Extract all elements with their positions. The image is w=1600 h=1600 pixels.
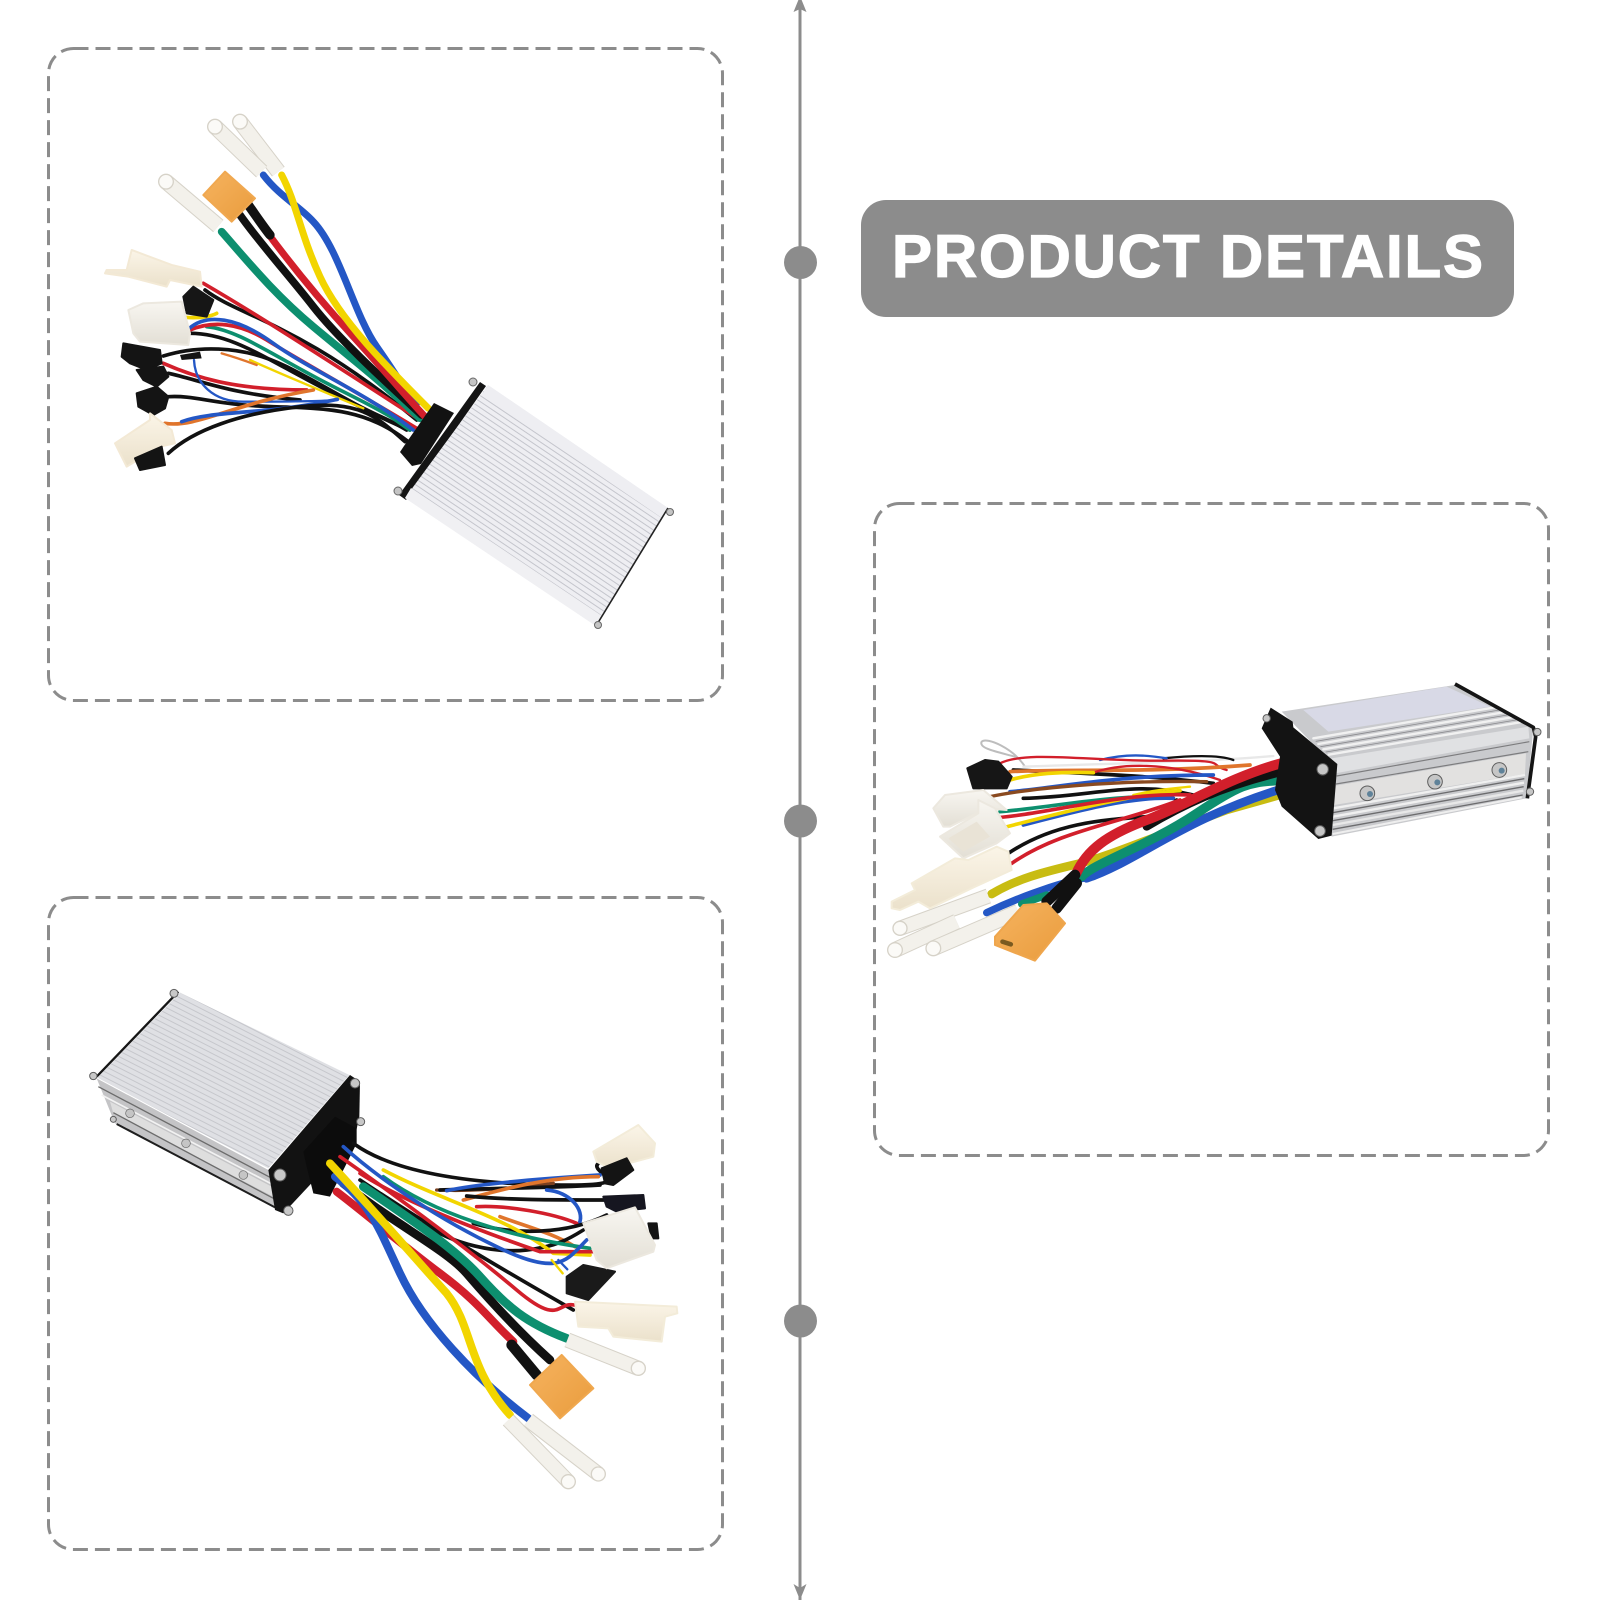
black rear edge bbox=[1455, 684, 1536, 798]
connectors bbox=[888, 760, 1065, 961]
connectors bbox=[105, 114, 278, 470]
white bullet terminals bbox=[159, 114, 278, 226]
black lower connector bbox=[135, 447, 165, 470]
timeline axis with arrows and dots bbox=[784, 0, 817, 1600]
wiring harness bbox=[981, 741, 1283, 913]
screws bbox=[1263, 715, 1541, 836]
lower cooling fins bbox=[1333, 775, 1525, 834]
white bullet terminals bbox=[508, 1340, 645, 1489]
black plug plate bbox=[1262, 708, 1337, 839]
black plug plate bbox=[268, 1075, 360, 1213]
white connector one bbox=[933, 790, 1007, 827]
white three-pin connector bbox=[128, 302, 190, 345]
side screws bbox=[126, 1109, 248, 1179]
screws bbox=[394, 378, 674, 628]
dot: lower bbox=[784, 1304, 817, 1338]
white connector two bbox=[940, 800, 1010, 858]
controller box bbox=[1262, 684, 1541, 839]
side panel bbox=[1334, 753, 1526, 805]
ribbed top face bbox=[97, 993, 349, 1168]
light bottom band bbox=[405, 488, 602, 626]
cream connector bbox=[892, 847, 1012, 910]
dot: upper bbox=[784, 246, 817, 279]
title badge bbox=[861, 200, 1514, 317]
lavender top label area bbox=[1303, 687, 1490, 732]
light top band bbox=[482, 385, 668, 518]
ribbed top face bbox=[405, 385, 668, 626]
black edge bbox=[399, 382, 486, 500]
dot: middle bbox=[784, 804, 817, 838]
title text: PRODUCT DETAILS bbox=[892, 223, 1483, 290]
orange power connector bbox=[203, 172, 255, 222]
cream two-pin connector bbox=[575, 1302, 677, 1342]
arrow: bottom bbox=[794, 1584, 806, 1600]
white connector bbox=[583, 1207, 655, 1268]
controller box bbox=[394, 378, 674, 628]
screws bbox=[90, 989, 365, 1215]
cream top connector bbox=[593, 1125, 655, 1168]
silver body bbox=[1282, 685, 1533, 837]
white bullet terminals bbox=[888, 896, 1018, 957]
controller box bbox=[90, 989, 365, 1215]
panel: bottom-left product view bbox=[48, 898, 722, 1550]
black small connectors bbox=[122, 343, 162, 370]
arrow: top bbox=[794, 0, 806, 12]
black plug block bbox=[303, 1117, 357, 1197]
black edge bbox=[97, 992, 178, 1077]
wiring harness bbox=[330, 1143, 608, 1418]
black switch connector bbox=[967, 760, 1012, 788]
cream two-pin connector bbox=[105, 250, 202, 287]
black connector bbox=[183, 287, 213, 317]
wiring harness bbox=[163, 175, 428, 453]
orange power connector bbox=[995, 903, 1065, 961]
upper cooling fins bbox=[1313, 707, 1520, 755]
orange power connector bbox=[530, 1355, 593, 1418]
black plug block bbox=[400, 403, 454, 466]
panel: top-left product view bbox=[48, 48, 722, 700]
black small connectors bbox=[602, 1158, 633, 1185]
highlighted band bbox=[1332, 727, 1529, 773]
panel: right product view bbox=[874, 504, 1548, 1156]
cream lower connector bbox=[115, 413, 175, 467]
connectors bbox=[508, 1125, 677, 1489]
side face bbox=[97, 1078, 277, 1208]
